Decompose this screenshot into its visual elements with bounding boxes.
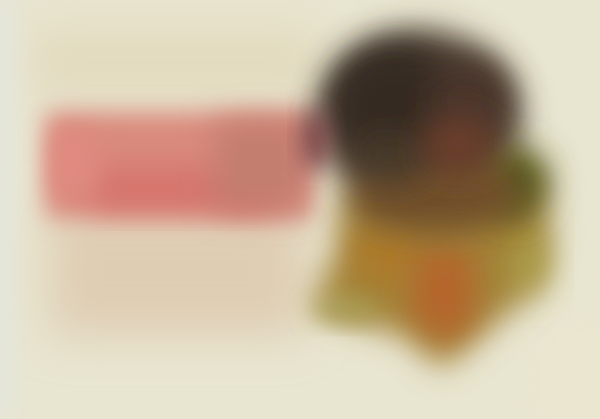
panel: lower beige text block	[50, 205, 305, 335]
panel: red heading block	[46, 112, 311, 218]
red-brown patch	[420, 115, 496, 175]
orange centre	[410, 250, 475, 345]
soft silhouette halo	[312, 30, 550, 368]
green patch	[481, 146, 549, 218]
dark red joint to left panel	[303, 108, 329, 172]
right yellow-olive patch	[510, 230, 550, 294]
dark head	[327, 43, 510, 184]
amber left patch	[350, 225, 420, 285]
olive foot	[311, 298, 379, 322]
brown mid section	[347, 157, 523, 233]
illustration: multicoloured figure	[303, 30, 550, 368]
